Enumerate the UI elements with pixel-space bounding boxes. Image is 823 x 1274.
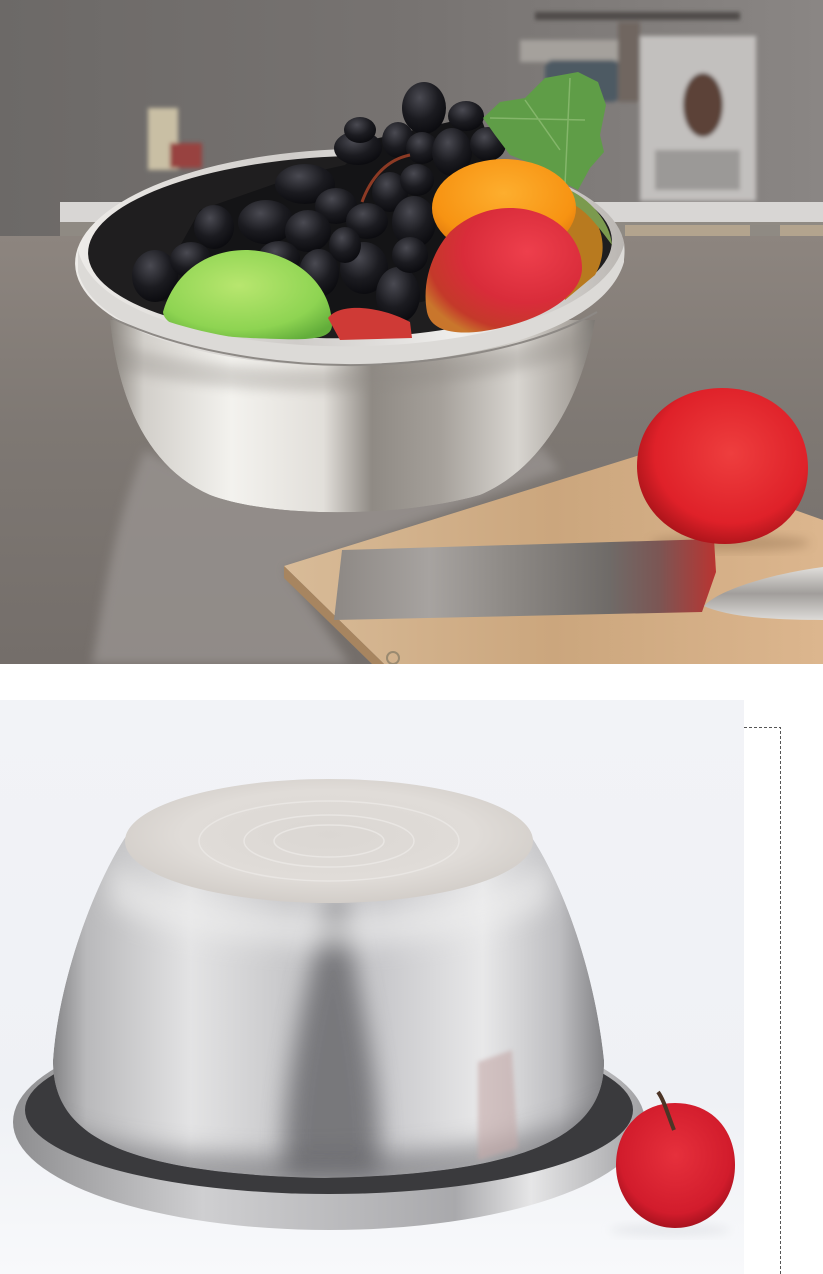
cutting board	[284, 455, 823, 664]
rim shadow line	[112, 312, 597, 365]
bowl reflection	[478, 1050, 518, 1160]
green leaf	[483, 72, 606, 190]
background shelf with blurred objects	[148, 12, 756, 201]
inverted bowl	[45, 830, 615, 1190]
dark base shading	[77, 1106, 592, 1178]
bowl rim	[72, 142, 628, 372]
panel: studio photo	[0, 700, 780, 1274]
small red apple	[616, 1103, 735, 1228]
photo bottom edge ring	[387, 652, 399, 664]
base concentric rings	[199, 801, 459, 881]
steel tray	[13, 1014, 645, 1230]
rim front lip	[78, 245, 624, 365]
red apple on board	[637, 388, 808, 544]
apple shadow on board	[650, 535, 810, 551]
bowl base	[125, 779, 533, 903]
apple stem	[658, 1092, 674, 1130]
bowl reflection on counter	[92, 445, 560, 664]
grape stem	[362, 155, 410, 202]
green apple	[163, 250, 332, 339]
dashed dimension line	[744, 728, 780, 1274]
grape cluster backing	[162, 122, 496, 314]
grapes	[132, 82, 506, 323]
green reflection in bowl	[571, 190, 612, 245]
tray inner	[25, 1026, 633, 1194]
red apple in bowl	[426, 208, 582, 333]
wall background	[0, 0, 823, 236]
bowl inner right reflection	[564, 206, 603, 300]
white back counter	[60, 202, 823, 237]
bowl interior	[86, 149, 614, 345]
steel bowl body	[100, 320, 610, 512]
knife	[334, 539, 823, 620]
studio background	[0, 700, 744, 1274]
dark centre streak	[284, 900, 379, 1175]
board edge	[284, 566, 384, 664]
pale band under base	[110, 860, 550, 946]
red fruit piece at bowl front	[328, 308, 412, 340]
counter top	[0, 236, 823, 664]
orange	[432, 159, 576, 237]
panel: kitchen photo	[0, 0, 823, 664]
apple shadow	[610, 1224, 730, 1236]
